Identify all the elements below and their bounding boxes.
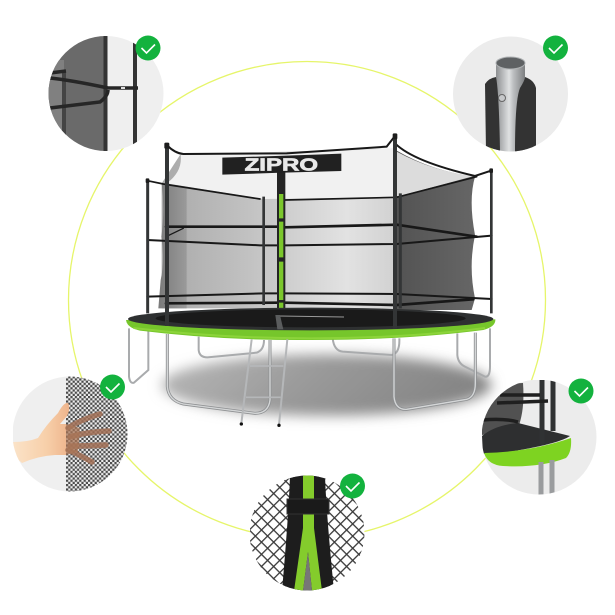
- straps: [50, 71, 138, 108]
- check badge: padding edge: [568, 378, 594, 404]
- metal pole: [496, 62, 525, 152]
- check badge: zipper: [340, 474, 365, 498]
- right foam sleeve: [515, 77, 536, 152]
- poles: [542, 380, 553, 444]
- ladder feet: [240, 422, 281, 427]
- green pad: [484, 438, 571, 466]
- net door zipper: [277, 172, 285, 315]
- mat logo: [279, 316, 344, 317]
- panel: padded pole detail: [453, 36, 569, 152]
- net right upper light: [397, 152, 474, 196]
- check badge: net strap: [136, 36, 160, 60]
- green padded rim: [126, 319, 495, 340]
- net fabric: [48, 36, 105, 152]
- net inside: [482, 383, 523, 435]
- vertical poles: [106, 36, 135, 152]
- front legs outer: [167, 333, 475, 413]
- panel: net strap detail: [48, 36, 164, 152]
- check badge: hand mesh: [100, 374, 125, 400]
- pole bolt: [498, 94, 506, 102]
- straps: [482, 395, 548, 422]
- ZIPRO banner: [222, 154, 341, 175]
- mesh half: [66, 376, 128, 492]
- dark mat: [482, 423, 570, 454]
- door strap bottom: [275, 315, 283, 329]
- connecting circle outline: [68, 62, 546, 538]
- ground shadow: [162, 354, 492, 416]
- front legs highlight: [167, 333, 475, 413]
- buckle: [287, 499, 329, 514]
- trampoline: [126, 133, 495, 427]
- pole caps: [146, 133, 493, 183]
- ladder: [241, 339, 287, 425]
- poles in front of mat: [167, 307, 395, 329]
- net poles: [148, 135, 491, 328]
- safety net panels: [158, 148, 475, 310]
- panel: zipper and buckle detail: [250, 475, 366, 591]
- rear legs: [129, 328, 490, 383]
- net upper light zone: [167, 148, 393, 199]
- pole opening: [496, 57, 525, 69]
- left seam: [62, 72, 66, 135]
- palm behind mesh: [66, 424, 80, 455]
- strap buckle: [121, 87, 125, 89]
- rim shading: [133, 328, 485, 338]
- net right panel: [397, 151, 475, 310]
- net left panel: [158, 183, 187, 308]
- ZIPRO logo text: ZIPRO: [245, 155, 318, 175]
- hand palm and thumb: [13, 403, 69, 463]
- jumping mat: [156, 309, 466, 327]
- check badge: padded pole: [543, 36, 568, 60]
- mesh gap between zipper halves: [303, 552, 312, 591]
- fingers behind mesh: [68, 414, 109, 462]
- net lighter side: [48, 60, 64, 131]
- metal legs: [541, 460, 552, 500]
- panel: green padding edge detail: [482, 380, 598, 500]
- black door band: [282, 475, 334, 591]
- jumping mat frame: [128, 308, 493, 330]
- center net: [162, 148, 393, 308]
- panel: hand through mesh: [13, 376, 128, 492]
- net ropes: [147, 136, 492, 305]
- left foam sleeve: [485, 77, 500, 152]
- green zipper: [294, 475, 322, 591]
